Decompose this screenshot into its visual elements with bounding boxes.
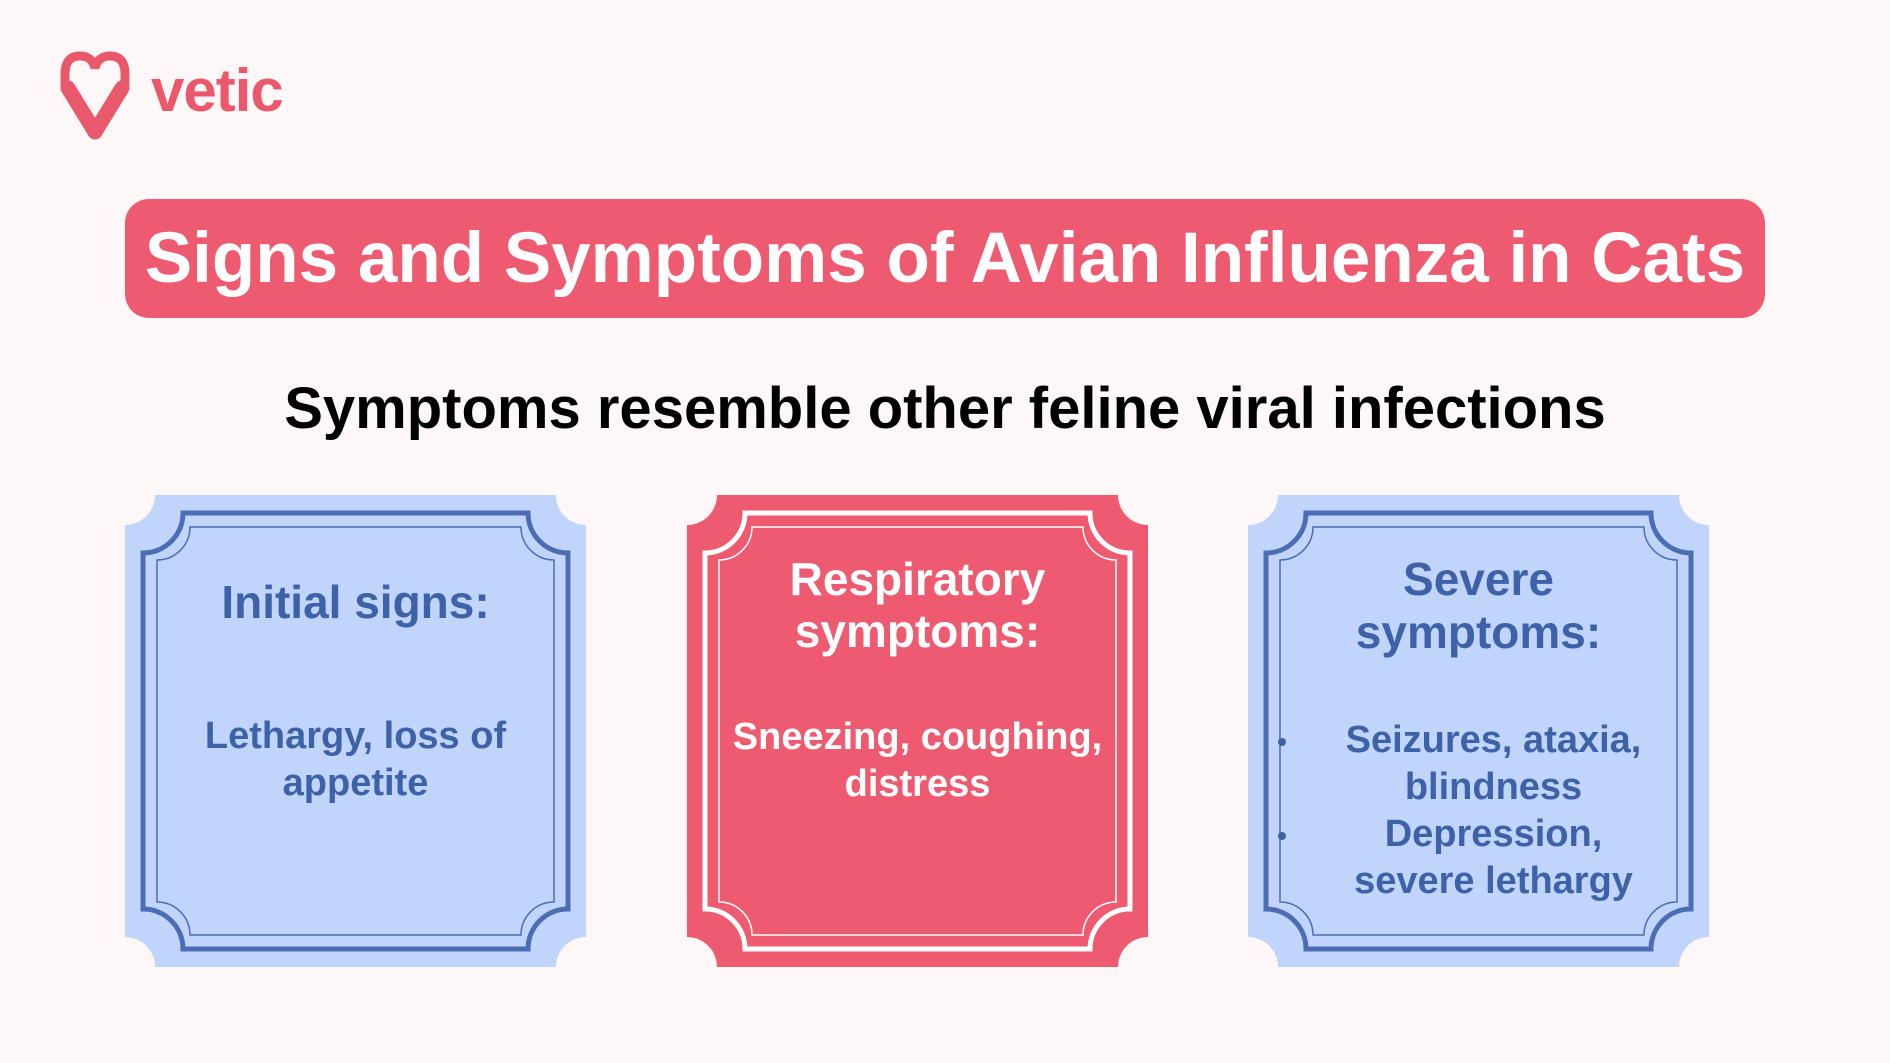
body text: Depression, bbox=[1385, 813, 1602, 855]
heading: Respiratory bbox=[790, 553, 1045, 605]
heading: Severe bbox=[1403, 553, 1554, 605]
body text: severe lethargy bbox=[1354, 860, 1633, 902]
body text bbox=[733, 716, 1102, 805]
heading: symptoms: bbox=[795, 605, 1040, 657]
body text bbox=[1346, 719, 1641, 902]
panel: severe symptoms bbox=[1248, 495, 1709, 967]
body text: blindness bbox=[1405, 766, 1582, 808]
logo bbox=[60, 52, 283, 140]
heading bbox=[790, 553, 1046, 657]
body text bbox=[205, 715, 506, 804]
body text: Lethargy, loss of bbox=[205, 715, 506, 757]
subtitle: Symptoms resemble other feline viral infections bbox=[284, 376, 1606, 441]
title: Signs and Symptoms of Avian Influenza in Cats bbox=[145, 219, 1745, 298]
brand name: vetic bbox=[151, 57, 283, 124]
heading bbox=[1356, 553, 1601, 658]
panel: initial signs bbox=[125, 495, 586, 967]
heading: Initial signs: bbox=[221, 576, 490, 628]
body text: Sneezing, coughing, bbox=[733, 716, 1102, 758]
title bbox=[125, 199, 1765, 318]
heading: symptoms: bbox=[1356, 606, 1601, 658]
panel: respiratory symptoms bbox=[687, 495, 1148, 967]
icon: heart V bbox=[60, 52, 130, 140]
body text: appetite bbox=[283, 762, 428, 804]
body text: distress bbox=[845, 763, 990, 805]
body text: Seizures, ataxia, bbox=[1346, 719, 1641, 761]
